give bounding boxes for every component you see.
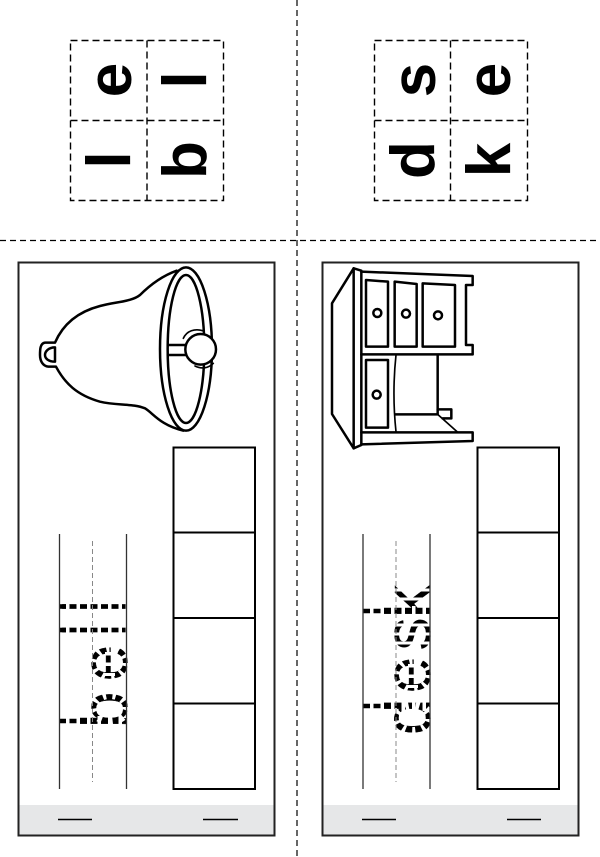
- letter boxes: desk: [478, 448, 559, 789]
- tracing word: desk: e: [370, 657, 444, 693]
- tracing word: desk: d: [370, 698, 444, 735]
- cut-out letter cards: bell: l: [75, 151, 144, 169]
- icon: bell: [40, 267, 216, 431]
- tracing word: bell: l: [45, 620, 147, 640]
- cut-out letter cards: desk: k: [455, 142, 524, 177]
- tracing word: desk: k: [370, 584, 444, 618]
- cut-out letter cards: bell: [70, 40, 224, 200]
- icon: desk: [332, 268, 473, 448]
- tracing word: bell: e: [67, 645, 141, 681]
- tracing word: bell: [45, 534, 147, 789]
- cut-out letter cards: bell: b: [151, 141, 220, 179]
- footer strip: bell: [19, 805, 274, 835]
- tracing word: bell: l: [45, 596, 147, 617]
- tracing word: desk: s: [370, 618, 444, 650]
- letter boxes: bell: [174, 448, 255, 789]
- cut-out letter cards: desk: e: [455, 63, 524, 97]
- tracing word: desk: [363, 534, 444, 789]
- cut-out letter cards: desk: [374, 40, 528, 200]
- cut-out letter cards: desk: s: [380, 63, 449, 97]
- panel: bell worksheet: [18, 262, 274, 836]
- cut-out letter cards: desk: d: [379, 141, 448, 179]
- footer strip: desk: [323, 805, 578, 835]
- panel: desk worksheet: [322, 262, 578, 836]
- cut-out letter cards: bell: l: [151, 71, 220, 89]
- cut-out letter cards: bell: e: [76, 63, 145, 97]
- tracing word: bell: b: [67, 692, 141, 728]
